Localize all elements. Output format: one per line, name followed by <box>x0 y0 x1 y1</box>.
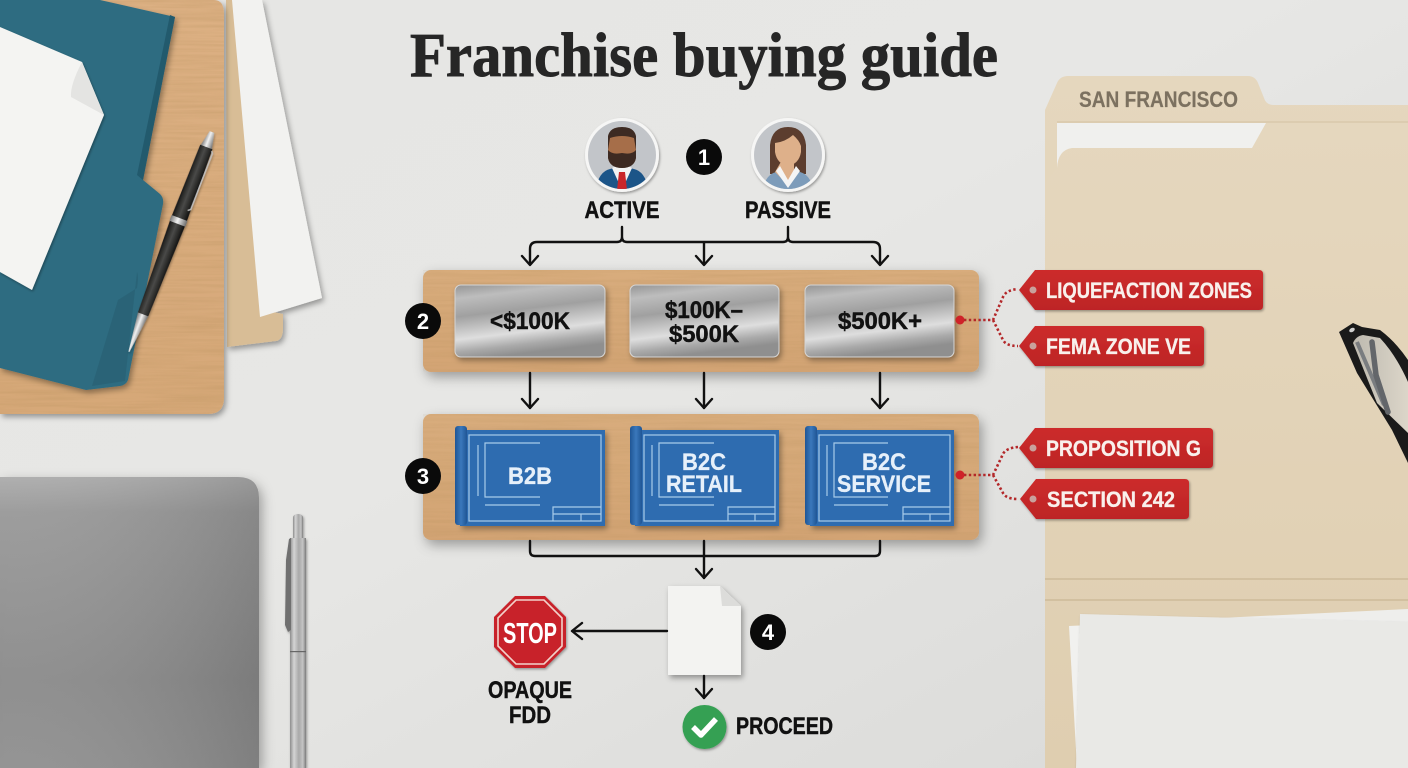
papers in folder pocket <box>1069 609 1408 768</box>
tag: section 242: SECTION 242 <box>1047 487 1175 512</box>
tag: FEMA zone VE <box>1019 326 1204 366</box>
reading glasses <box>1339 323 1408 463</box>
tag: proposition G: PROPOSITION G <box>1046 436 1201 461</box>
panel: step 2 budgets <box>423 270 979 372</box>
label: proceed: PROCEED <box>736 713 833 740</box>
panel: step 3 business models <box>423 414 979 540</box>
plate: 500K plus: $500K+ <box>838 308 922 335</box>
label: opaque FDD: OPAQUE <box>488 677 572 704</box>
blueprint: B2C service: SERVICE <box>837 471 931 498</box>
number badge 2: 2 <box>417 309 429 334</box>
plate: under 100K <box>455 285 605 357</box>
number badge 3 <box>405 458 441 494</box>
blueprint: B2B: B2B <box>508 463 552 490</box>
FDD document <box>668 586 741 675</box>
plate: 100K to 500K <box>630 285 779 357</box>
blueprint: B2C retail <box>630 426 779 526</box>
stop sign <box>494 596 566 668</box>
white sheet in folder <box>1057 123 1269 168</box>
closed laptop <box>0 477 259 768</box>
arrows: budgets to business models <box>522 373 888 408</box>
proceed check icon <box>682 705 726 749</box>
number badge 2 <box>405 303 441 339</box>
stop sign: STOP <box>503 618 557 650</box>
paper stack behind board <box>226 0 322 347</box>
tag: proposition G <box>1019 428 1213 468</box>
plate: 100K to 500K: $500K <box>669 321 740 348</box>
label: opaque FDD <box>488 677 572 729</box>
folder front pocket <box>1045 123 1408 768</box>
manila folder <box>1045 76 1408 768</box>
arrow: document to stop <box>572 623 667 639</box>
callout: regulations <box>956 428 1213 519</box>
wooden clipboard with teal folder <box>0 0 224 414</box>
dotted connector <box>956 447 1018 499</box>
tag: section 242 <box>1020 479 1189 519</box>
avatar: active investor <box>585 118 659 195</box>
dotted connector <box>956 289 1018 346</box>
connector: business models to FDD <box>530 541 880 578</box>
connector: investor types to budgets <box>522 227 888 265</box>
tag: FEMA zone VE: FEMA ZONE VE <box>1046 334 1191 359</box>
plate: under 100K: <$100K <box>490 308 571 335</box>
label: active: ACTIVE <box>584 197 660 224</box>
avatar: passive investor <box>751 118 825 195</box>
callout: location risks <box>956 270 1263 366</box>
silver pen <box>285 514 306 768</box>
blueprint: B2B <box>455 426 605 526</box>
black pen <box>121 129 220 355</box>
loose white sheet <box>0 27 104 290</box>
number badge 4: 4 <box>762 620 775 645</box>
blueprint: B2C retail: B2C <box>682 449 726 476</box>
plate: 100K to 500K: $100K– <box>665 297 743 324</box>
number badge 1 <box>686 139 722 175</box>
blueprint: B2C service: B2C <box>862 449 906 476</box>
tag: liquefaction zones <box>1019 270 1263 310</box>
number badge 4 <box>750 614 786 650</box>
folder tab label: SAN FRANCISCO <box>1079 87 1238 112</box>
number badge 1: 1 <box>698 145 710 170</box>
tag: liquefaction zones: LIQUEFACTION ZONES <box>1046 278 1252 303</box>
title: Franchise buying guide <box>410 22 998 90</box>
blueprint: B2C service <box>805 426 954 526</box>
teal folder <box>0 0 175 390</box>
number badge 3: 3 <box>417 464 429 489</box>
label: opaque FDD: FDD <box>509 702 551 729</box>
step 1: investor types <box>584 118 831 224</box>
label: passive: PASSIVE <box>745 197 831 224</box>
arrow: document to proceed <box>696 676 712 698</box>
plate: 500K plus <box>805 285 954 357</box>
blueprint: B2C retail: RETAIL <box>666 471 742 498</box>
